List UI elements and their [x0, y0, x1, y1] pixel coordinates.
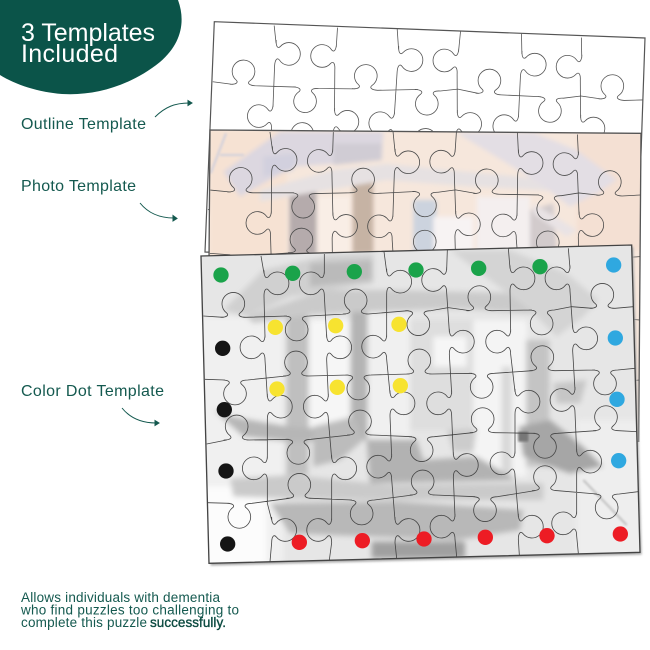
puzzle outline: outline template — [208, 26, 642, 210]
photo: pale bird feeder — [210, 130, 640, 438]
description text: who find puzzles too challenging to — [20, 602, 239, 618]
panel: outline template sheet — [204, 21, 646, 253]
puzzle outline: photo template — [202, 122, 647, 450]
title: Included — [21, 40, 118, 68]
description text: complete this puzzle — [21, 615, 147, 630]
panel: photo template sheet — [200, 122, 650, 457]
arrow: to outline template — [155, 100, 192, 117]
green dots row — [213, 259, 548, 283]
description text — [20, 590, 239, 630]
label: outline template: Outline Template — [21, 116, 146, 133]
arrow: to photo template — [140, 203, 177, 221]
photo: greyscale bird feeder — [190, 240, 650, 573]
red dots row — [292, 526, 628, 550]
title: 3 Templates — [21, 19, 155, 47]
label: color dot template: Color Dot Template — [21, 383, 164, 400]
panel: color dot template sheet — [190, 240, 650, 573]
description text: successfully. — [150, 615, 226, 630]
yellow dots — [268, 317, 408, 397]
arrow: to color dot template — [122, 408, 159, 426]
black dots column — [215, 341, 235, 552]
label: photo template: Photo Template — [21, 178, 136, 195]
blue dots column — [606, 257, 626, 468]
heading badge — [0, 0, 182, 94]
description text: Allows individuals with dementia — [21, 590, 220, 605]
puzzle outline: color dot template — [203, 248, 638, 562]
